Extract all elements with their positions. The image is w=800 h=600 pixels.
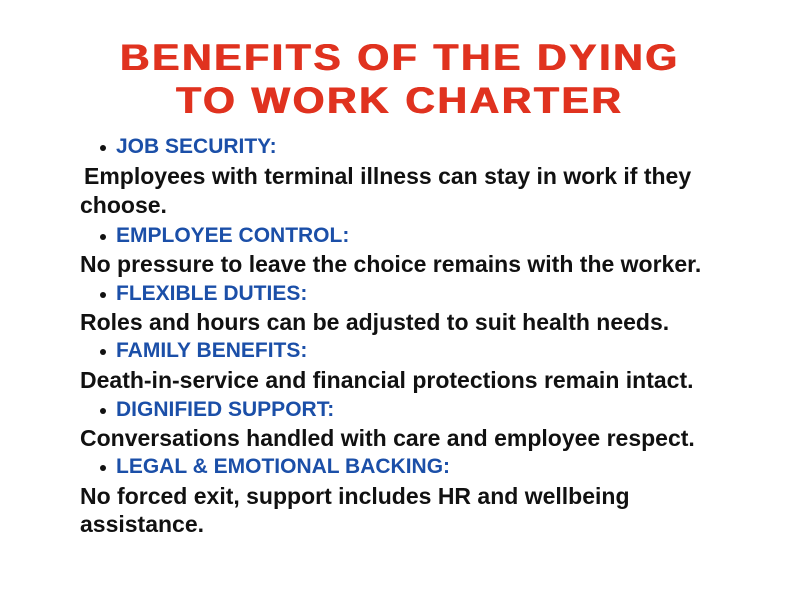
item: dignified support <box>80 398 695 451</box>
item: dignified support: DIGNIFIED SUPPORT: <box>116 398 334 421</box>
item: flexible duties <box>80 282 669 335</box>
title: BENEFITS OF THE DYING <box>120 37 680 78</box>
item: employee control: No pressure to leave the choice remains with the worker. <box>80 251 701 277</box>
item: legal and emotional backing: No forced exit, support includes HR and wellbeing <box>80 483 630 509</box>
title: TO WORK CHARTER <box>176 80 624 121</box>
item: employee control: EMPLOYEE CONTROL: <box>116 224 349 247</box>
item: family benefits: Death-in-service and financial protections remain intact. <box>80 367 694 393</box>
item: flexible duties: Roles and hours can be adjusted to suit health needs. <box>80 309 669 335</box>
benefits list <box>80 135 701 537</box>
item: job security: choose. <box>80 192 167 218</box>
item: flexible duties: FLEXIBLE DUTIES: <box>116 282 307 305</box>
item: job security: JOB SECURITY: <box>116 135 277 158</box>
item: family benefits <box>80 339 694 393</box>
item: legal and emotional backing: assistance. <box>80 511 204 537</box>
item: family benefits: FAMILY BENEFITS: <box>116 339 307 362</box>
title <box>120 37 680 121</box>
item: dignified support: Conversations handled with care and employee respect. <box>80 425 695 451</box>
item: employee control <box>80 224 701 277</box>
item: job security: Employees with terminal illness can stay in work if they <box>84 163 691 189</box>
item: legal and emotional backing <box>80 455 630 537</box>
item: job security <box>80 135 691 218</box>
item: legal and emotional backing: LEGAL & EMOTIONAL BACKING: <box>116 455 450 478</box>
